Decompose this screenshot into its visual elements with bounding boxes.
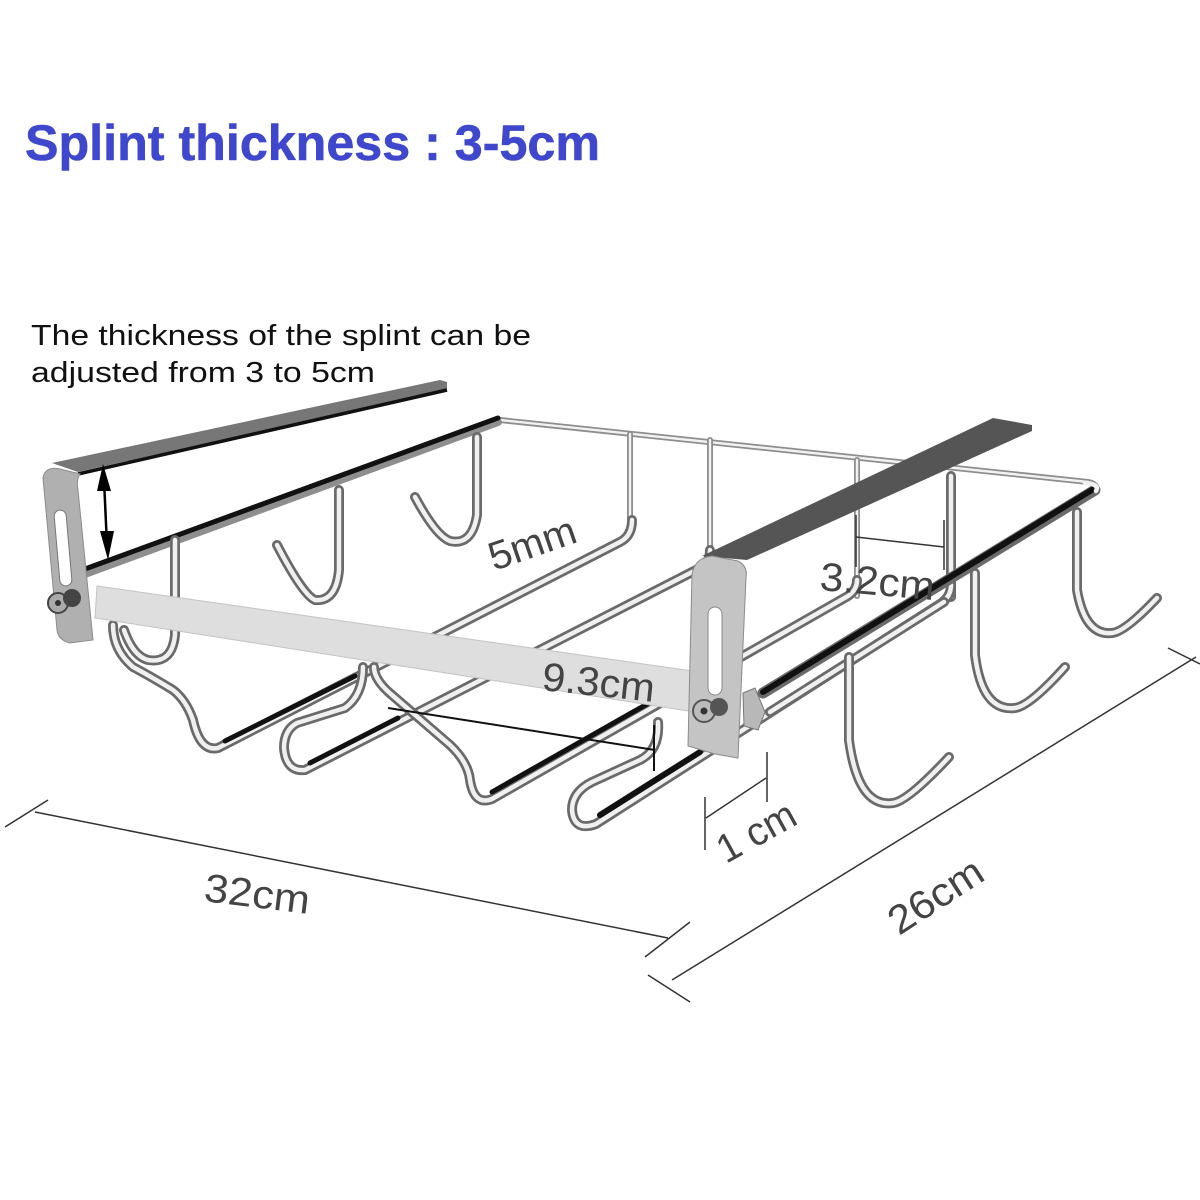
right side frame rail <box>763 483 1097 712</box>
dimension: 32cm: 32cm <box>202 866 312 923</box>
left hooks <box>124 437 477 660</box>
left clip plate with slot and bolt <box>43 468 93 643</box>
wire rail D <box>572 585 951 826</box>
rack: back frame and rear uprights <box>500 420 1096 597</box>
description text: The thickness of the splint can be <box>31 320 531 352</box>
dimension: 3.2cm <box>818 515 944 609</box>
left clip top strip <box>52 380 447 474</box>
thickness arrow <box>97 464 114 560</box>
dimension: 32cm <box>5 800 690 957</box>
dimension: 1cm: 1 cm <box>709 793 804 872</box>
dimension: 26cm <box>648 648 1200 1002</box>
dimension: 9.3cm <box>388 655 657 771</box>
dimension: 9.3cm: 9.3cm <box>540 655 657 711</box>
dimension: 1cm <box>705 752 804 872</box>
right clip top strip <box>702 418 1032 560</box>
dimension: 5mm: 5mm <box>483 509 582 580</box>
wire rail C <box>374 580 857 800</box>
right hooks <box>849 512 1157 803</box>
right clip plate with slot and bolt <box>688 556 765 758</box>
front cross bar <box>95 586 700 712</box>
dimension: 26cm: 26cm <box>880 849 992 944</box>
wire rail B <box>284 550 710 770</box>
title: Splint thickness : 3-5cm <box>25 115 600 171</box>
description text: adjusted from 3 to 5cm <box>31 357 375 389</box>
description text <box>31 320 531 389</box>
wire rail A <box>113 520 632 748</box>
dimension: 3.2cm: 3.2cm <box>818 555 937 609</box>
left side frame rail <box>85 418 498 574</box>
